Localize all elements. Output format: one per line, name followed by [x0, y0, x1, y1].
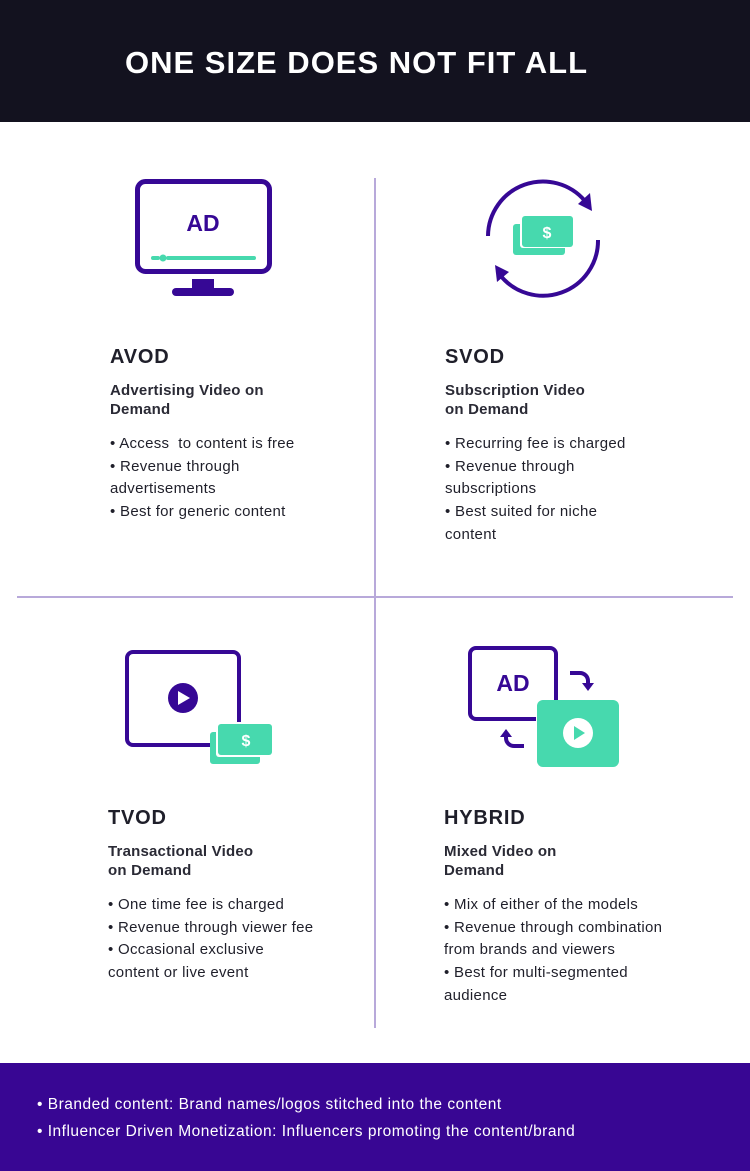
bullets SVOD: [445, 435, 626, 543]
icon: TVOD video with money: $: [242, 733, 251, 750]
heading TVOD: TVOD: [108, 807, 167, 829]
title: ONE SIZE DOES NOT FIT ALL: [125, 45, 588, 80]
panel: AVOD: [110, 346, 295, 520]
icon: TVOD video with money: [125, 650, 272, 764]
subtitle AVOD: [110, 382, 264, 418]
subtitle TVOD: Transactional Video: [108, 843, 253, 860]
bullets HYBRID: [444, 896, 662, 1004]
icon: AD monitor: [135, 179, 272, 296]
bullets SVOD: • Best suited for niche: [445, 503, 597, 520]
subtitle TVOD: [108, 843, 253, 879]
footer notes: [37, 1096, 575, 1140]
footer notes: • Branded content: Brand names/logos stitched into the content: [37, 1096, 502, 1113]
heading SVOD: SVOD: [445, 346, 505, 368]
bullets AVOD: • Access to content is free: [110, 435, 295, 452]
panel: SVOD: [445, 346, 626, 543]
horizontal divider: [17, 596, 733, 598]
bullets SVOD: content: [445, 526, 496, 543]
bullets AVOD: • Best for generic content: [110, 503, 286, 520]
bullets AVOD: advertisements: [110, 480, 216, 497]
subtitle SVOD: [445, 382, 585, 418]
footer: [0, 1063, 750, 1171]
icon: subscription cycle: [486, 180, 600, 298]
bullets AVOD: • Revenue through: [110, 458, 240, 475]
bullets HYBRID: • Best for multi-segmented: [444, 964, 628, 981]
bullets HYBRID: • Mix of either of the models: [444, 896, 638, 913]
heading AVOD: AVOD: [110, 346, 170, 368]
bullets TVOD: • Occasional exclusive: [108, 941, 264, 958]
subtitle HYBRID: [444, 843, 557, 879]
icon: hybrid: AD: [496, 670, 530, 696]
panel: TVOD: [108, 807, 313, 981]
subtitle HYBRID: Mixed Video on: [444, 843, 557, 860]
subtitle HYBRID: Demand: [444, 862, 504, 879]
header: [0, 0, 750, 122]
subtitle SVOD: on Demand: [445, 401, 528, 418]
bullets TVOD: [108, 896, 313, 981]
bullets SVOD: • Recurring fee is charged: [445, 435, 626, 452]
vertical divider: [374, 178, 376, 1028]
icon: subscription cycle: $: [543, 225, 552, 242]
bullets TVOD: • One time fee is charged: [108, 896, 284, 913]
subtitle AVOD: Advertising Video on: [110, 382, 264, 399]
bullets SVOD: subscriptions: [445, 480, 536, 497]
subtitle SVOD: Subscription Video: [445, 382, 585, 399]
footer notes: • Influencer Driven Monetization: Influencers promoting the content/brand: [37, 1123, 575, 1140]
icon: AD monitor: AD: [186, 210, 220, 236]
bullets AVOD: [110, 435, 295, 520]
heading HYBRID: HYBRID: [444, 807, 525, 829]
subtitle TVOD: on Demand: [108, 862, 191, 879]
bullets TVOD: content or live event: [108, 964, 249, 981]
bullets HYBRID: • Revenue through combination: [444, 919, 662, 936]
bullets SVOD: • Revenue through: [445, 458, 575, 475]
bullets HYBRID: audience: [444, 987, 507, 1004]
subtitle AVOD: Demand: [110, 401, 170, 418]
bullets HYBRID: from brands and viewers: [444, 941, 615, 958]
panel: HYBRID: [444, 807, 662, 1004]
icon: hybrid: [468, 646, 619, 767]
bullets TVOD: • Revenue through viewer fee: [108, 919, 313, 936]
